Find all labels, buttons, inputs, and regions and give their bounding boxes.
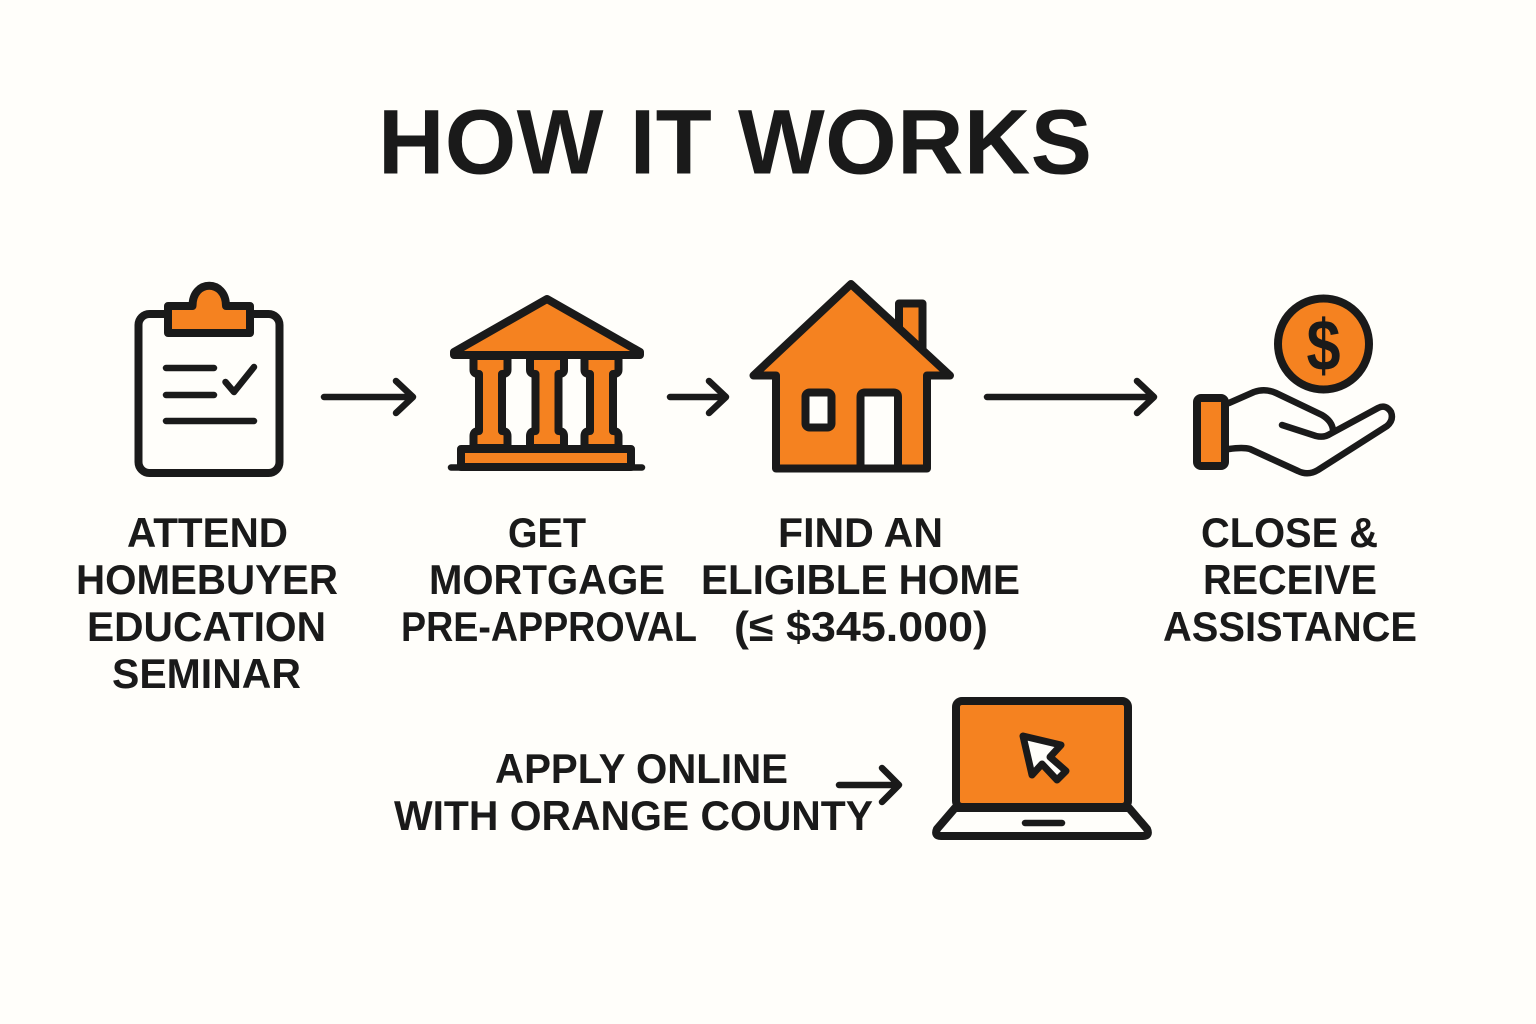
step 4 label: CLOSE & xyxy=(1201,509,1378,556)
step 4 label: RECEIVE xyxy=(1203,556,1377,603)
arrow: apply online to laptop xyxy=(839,768,899,802)
step 1 label: HOMEBUYER xyxy=(76,556,338,603)
arrow: step 3 to step 4 xyxy=(987,381,1154,413)
step 2 label: PRE-APPROVAL xyxy=(401,603,697,650)
arrow: step 1 to step 2 xyxy=(324,381,413,413)
apply online label: WITH ORANGE COUNTY xyxy=(394,792,873,839)
bank columns xyxy=(474,356,618,448)
step 4 label xyxy=(1163,509,1417,650)
icon: house xyxy=(754,284,950,468)
step 2 label: MORTGAGE xyxy=(429,556,665,603)
step 2 label xyxy=(401,509,697,650)
icon: hand with dollar coin xyxy=(1197,298,1392,473)
step 1 label: SEMINAR xyxy=(112,650,301,697)
step 1 label: ATTEND xyxy=(127,509,288,556)
step 3 label xyxy=(701,509,1020,650)
step 3 label: (≤ $345.000) xyxy=(734,603,988,650)
apply online label xyxy=(394,745,873,839)
step 1 label: EDUCATION xyxy=(87,603,326,650)
step 3 label: ELIGIBLE HOME xyxy=(701,556,1020,603)
step 3 label: FIND AN xyxy=(778,509,943,556)
step 2 label: GET xyxy=(508,509,586,556)
icon: laptop with cursor xyxy=(936,701,1148,836)
icon: bank xyxy=(451,299,642,468)
arrow: step 2 to step 3 xyxy=(670,381,726,413)
icon: clipboard xyxy=(138,286,280,473)
apply online label: APPLY ONLINE xyxy=(495,745,788,792)
step 1 label xyxy=(76,509,338,697)
step 4 label: ASSISTANCE xyxy=(1163,603,1417,650)
icon: hand with dollar coin: $ xyxy=(1306,306,1341,386)
title: HOW IT WORKS xyxy=(378,92,1092,194)
